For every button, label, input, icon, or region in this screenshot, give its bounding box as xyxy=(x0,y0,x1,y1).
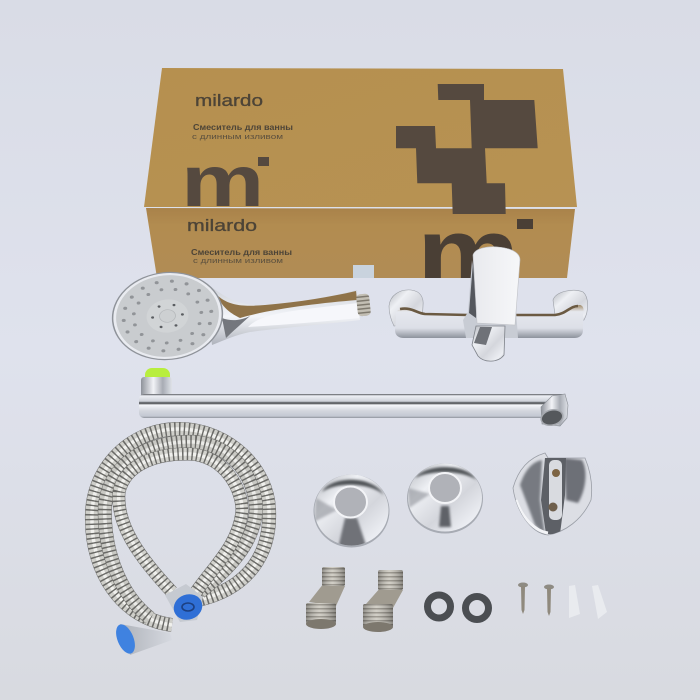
spout tube xyxy=(139,394,567,418)
hose connector upper xyxy=(165,584,206,624)
connector cone xyxy=(120,624,172,655)
right body dark reflection xyxy=(516,306,578,315)
holder screw hole top xyxy=(552,469,560,477)
handle highlight xyxy=(248,303,359,327)
center cradle xyxy=(541,458,566,534)
left inlet cap xyxy=(389,290,423,326)
adapter bottom shade xyxy=(306,603,336,625)
box logo top: milardo xyxy=(195,91,263,110)
flange rim xyxy=(314,474,390,548)
big m logo front: m xyxy=(417,199,519,306)
left shade wedge xyxy=(314,498,337,522)
hose strand inner xyxy=(119,454,242,592)
screw shaft xyxy=(547,588,551,616)
column dark sliver xyxy=(469,262,478,318)
flange rim xyxy=(407,464,483,534)
right inlet cap xyxy=(553,290,588,322)
wall plug right xyxy=(592,585,607,619)
box subtitle top: Смеситель для ванны xyxy=(193,123,293,132)
center hub xyxy=(159,309,176,323)
right inner dark xyxy=(564,458,585,503)
hand shower xyxy=(108,267,371,365)
green protective cap xyxy=(145,368,170,388)
box logo front: milardo xyxy=(187,216,257,235)
screw right xyxy=(544,584,554,616)
box subtitle front: Смеситель для ванны xyxy=(191,248,292,257)
wall mixer faucet xyxy=(389,247,588,361)
left shade wedge xyxy=(408,488,430,508)
adapter bottom shade xyxy=(363,604,393,628)
screw head xyxy=(544,584,554,590)
aerator elbow xyxy=(541,394,568,426)
plug slot xyxy=(182,603,194,611)
handle dark reflection xyxy=(222,316,250,338)
screw shaft xyxy=(521,586,525,614)
mixer body bar xyxy=(395,305,584,338)
escutcheon flange left xyxy=(314,474,390,548)
handle brown reflection xyxy=(218,291,357,318)
adapter opening xyxy=(306,619,336,629)
product box xyxy=(144,68,577,278)
shower wall holder xyxy=(513,453,592,535)
center disc xyxy=(145,297,190,335)
adapter top thread xyxy=(322,567,345,586)
dark center nozzles xyxy=(151,303,184,329)
diverter knob xyxy=(472,326,505,361)
hose strand middle xyxy=(105,442,256,618)
box notch xyxy=(353,265,374,278)
wall plug left xyxy=(569,585,580,618)
adapter top shade xyxy=(378,570,403,590)
dark slot reflection xyxy=(439,506,451,527)
shower handle xyxy=(205,282,360,345)
flange hole xyxy=(429,473,461,503)
dark lower wedge xyxy=(338,518,367,548)
holder screw hole bottom xyxy=(548,502,558,512)
adapter middle xyxy=(366,587,403,608)
knob dark reflection xyxy=(474,327,492,345)
box top panel xyxy=(144,68,577,207)
big m logo top: m xyxy=(181,140,264,222)
nozzle ring mid xyxy=(131,286,204,346)
box subtitle second line top: с длинным изливом xyxy=(192,132,283,141)
threaded adapter right xyxy=(363,570,403,632)
adapter top shade xyxy=(322,567,345,586)
adapter middle xyxy=(309,583,345,606)
flange hole xyxy=(334,486,367,518)
dark upper band xyxy=(415,467,477,480)
hose connector lower xyxy=(112,622,172,656)
threaded adapter left xyxy=(306,567,345,629)
holder reflections xyxy=(516,458,585,535)
box subtitle second line front: с длинным изливом xyxy=(193,256,283,265)
big m logo top xyxy=(187,157,269,206)
adapter bottom thread xyxy=(306,603,336,625)
lower shell bright edge xyxy=(516,500,548,533)
hose strand outer xyxy=(92,429,269,625)
flange reflections xyxy=(408,467,477,527)
shower thread xyxy=(356,293,371,317)
big m logo front xyxy=(424,219,533,278)
left inner dark xyxy=(520,460,545,535)
screw left xyxy=(518,582,528,614)
adapter bottom thread xyxy=(363,604,393,628)
flexible hose xyxy=(92,429,269,625)
box pixel pattern xyxy=(396,84,538,214)
head rim xyxy=(108,267,227,365)
nozzle ring outer xyxy=(120,277,215,355)
lever handle xyxy=(473,247,520,325)
shower head xyxy=(108,267,227,365)
rubber washer right xyxy=(466,596,488,620)
head face xyxy=(112,270,223,362)
spout collar xyxy=(141,377,172,399)
connector blue plug xyxy=(112,622,139,656)
connector blue plug xyxy=(170,590,206,624)
escutcheon flange right xyxy=(407,464,483,534)
long spout xyxy=(139,368,568,428)
adapter opening xyxy=(363,622,393,632)
chrome column xyxy=(463,260,518,338)
center highlight xyxy=(549,460,562,520)
flange dome xyxy=(314,474,388,546)
rubber washer left xyxy=(428,595,450,618)
adapter top thread xyxy=(378,570,403,590)
left body dark reflection xyxy=(400,309,468,315)
aerator mesh xyxy=(539,407,565,428)
dark upper band xyxy=(322,480,384,495)
flange reflections xyxy=(314,480,384,548)
box front panel xyxy=(146,208,575,278)
holder shell xyxy=(513,453,592,535)
screw head xyxy=(518,582,528,588)
connector nut xyxy=(165,584,203,622)
flange dome xyxy=(408,464,482,532)
